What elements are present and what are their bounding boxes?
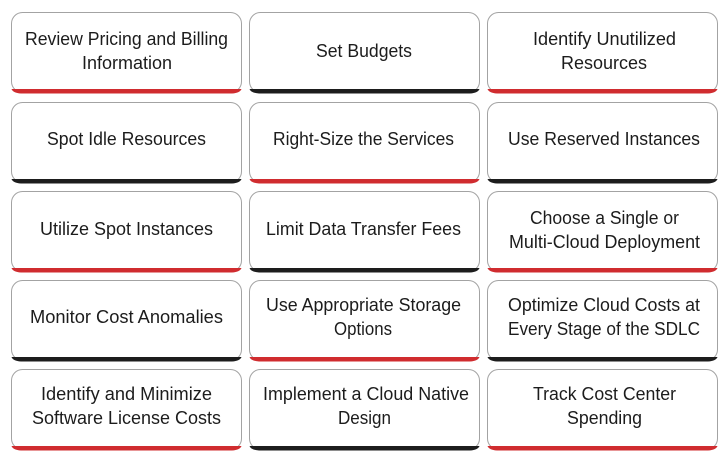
card: Right-Size the Services xyxy=(250,102,480,184)
card: Review Pricing and Billing Information xyxy=(12,12,242,94)
card: Identify Unutilized Resources xyxy=(488,12,718,94)
card: Choose a Single or Multi-Cloud Deployment: Multi-Cloud Deployment xyxy=(509,232,700,252)
card: Choose a Single or Multi-Cloud Deployment: Choose a Single or xyxy=(530,208,679,228)
card: Utilize Spot Instances: Utilize Spot Instances xyxy=(40,219,213,239)
card: Monitor Cost Anomalies: Monitor Cost Anomalies xyxy=(30,307,223,327)
card: Right-Size the Services: Right-Size the Services xyxy=(273,129,454,149)
card: Optimize Cloud Costs at Every Stage of the SDLC: Optimize Cloud Costs at xyxy=(508,295,700,315)
card: Identify and Minimize Software License Costs: Software License Costs xyxy=(32,408,221,428)
card: Review Pricing and Billing Information: Information xyxy=(82,53,172,73)
card: Spot Idle Resources: Spot Idle Resources xyxy=(47,129,206,149)
card: Utilize Spot Instances xyxy=(12,192,242,272)
card: Implement a Cloud Native Design: Implement a Cloud Native xyxy=(263,384,469,404)
card: Track Cost Center Spending xyxy=(488,370,718,450)
card: Optimize Cloud Costs at Every Stage of the SDLC xyxy=(488,280,718,362)
card: Track Cost Center Spending: Track Cost Center xyxy=(533,384,676,404)
card: Implement a Cloud Native Design: Design xyxy=(338,408,391,428)
card: Implement a Cloud Native Design xyxy=(250,370,480,450)
card: Limit Data Transfer Fees xyxy=(250,192,480,272)
card: Use Reserved Instances xyxy=(488,102,718,184)
card: Use Reserved Instances: Use Reserved Instances xyxy=(508,129,700,149)
card: Spot Idle Resources xyxy=(12,102,242,184)
card: Review Pricing and Billing Information: Review Pricing and Billing xyxy=(25,29,228,49)
card: Identify Unutilized Resources: Identify Unutilized xyxy=(533,29,676,49)
card: Use Appropriate Storage Options xyxy=(250,280,480,362)
card: Identify and Minimize Software License Costs: Identify and Minimize xyxy=(41,384,212,404)
card: Track Cost Center Spending: Spending xyxy=(567,408,642,428)
card: Optimize Cloud Costs at Every Stage of the SDLC: Every Stage of the SDLC xyxy=(508,319,700,339)
card: Identify and Minimize Software License Costs xyxy=(12,370,242,450)
card: Set Budgets: Set Budgets xyxy=(316,41,412,61)
card: Limit Data Transfer Fees: Limit Data Transfer Fees xyxy=(266,219,461,239)
card: Set Budgets xyxy=(250,12,480,94)
card: Identify Unutilized Resources: Resources xyxy=(561,53,647,73)
card: Choose a Single or Multi-Cloud Deployment xyxy=(488,192,718,272)
card: Use Appropriate Storage Options: Use Appropriate Storage xyxy=(266,295,461,315)
card: Use Appropriate Storage Options: Options xyxy=(334,319,392,339)
card: Monitor Cost Anomalies xyxy=(12,280,242,362)
